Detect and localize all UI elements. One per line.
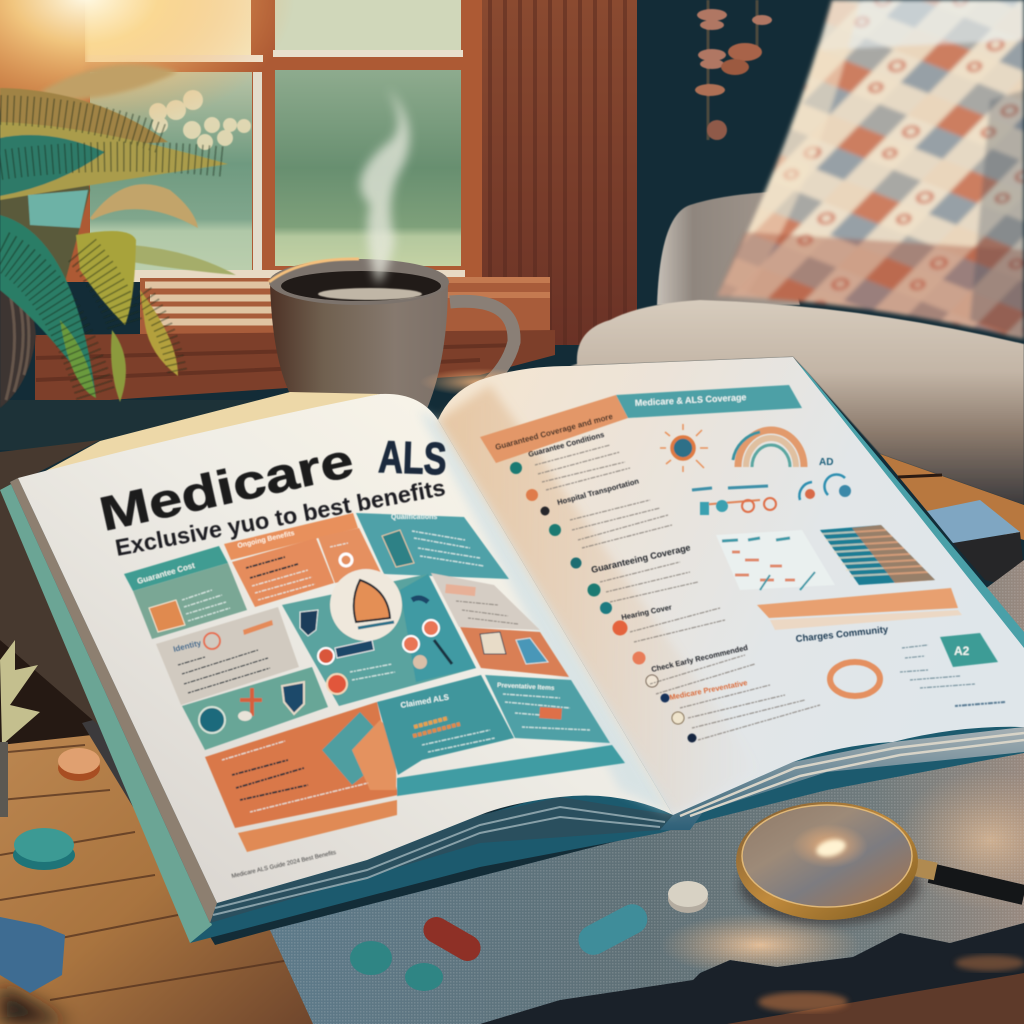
callout: A2 badge: A2 [954, 644, 970, 658]
coffee cup [269, 259, 514, 424]
pill: teal small [405, 963, 443, 991]
cream bar [770, 610, 962, 630]
orange strip [238, 800, 397, 852]
curtain [482, 0, 637, 345]
sun glow [0, 0, 295, 135]
panel: guarantee: Guarantee Cost [136, 561, 196, 586]
book cover [0, 358, 1024, 943]
armchair [570, 192, 1024, 505]
panel: teal eligibility: Qualifications [391, 514, 437, 521]
panel: big orange [205, 702, 398, 828]
header: teal [616, 385, 802, 418]
panel: center teal [282, 569, 476, 706]
chart legend text [900, 645, 975, 688]
list headings: Hospital Transportation [556, 476, 640, 507]
chart: striped bands [820, 525, 935, 585]
left page panels [124, 513, 625, 880]
panel: teal right lower: Preventative Items [497, 682, 555, 692]
page footer [955, 702, 1005, 706]
panel: teal eligibility [356, 513, 509, 579]
blurred orange foliage [0, 0, 85, 110]
bullet list [510, 462, 696, 742]
patterned pillow [717, 0, 1024, 339]
sunlight wedge beside cup [420, 368, 540, 396]
small magazine [927, 500, 1020, 543]
list headings: Hearing Cover [621, 602, 673, 622]
list text lines [535, 445, 820, 740]
wooden table [0, 454, 1024, 1024]
sub heading: Charges Community [795, 624, 889, 645]
panel: flow diagram [716, 530, 835, 590]
panel: orange right [460, 627, 569, 677]
orange bar [757, 588, 958, 618]
hanging plant [695, 0, 772, 140]
window [62, 0, 482, 282]
list headings [527, 430, 749, 702]
chart: donut ring [830, 662, 880, 696]
panel: orange coverage [224, 513, 358, 607]
panel: guarantee [124, 546, 247, 639]
header: orange: Guaranteed Coverage and more [494, 412, 614, 452]
panel: teal right lower [485, 675, 610, 743]
window sill [0, 278, 555, 450]
list headings: Medicare Preventative [669, 678, 748, 702]
list headings: Guarantee Conditions [527, 430, 605, 459]
fold highlight [40, 392, 380, 474]
capsule: red [419, 912, 485, 966]
steam [360, 88, 409, 285]
potted fern [0, 64, 236, 408]
panel: small orange [318, 528, 381, 583]
diagram: arrows row [692, 474, 851, 515]
placemat [82, 560, 1024, 1024]
panel: grey text: Identity [172, 638, 203, 654]
panel: teal lower: Claimed ALS [400, 692, 450, 710]
label: A2 small: AD [819, 457, 833, 468]
icon: sun [660, 424, 708, 472]
pill: orange [58, 748, 100, 781]
header: teal: Medicare & ALS Coverage [635, 392, 747, 408]
right page content [480, 385, 1005, 742]
panel: orange coverage: Ongoing Benefits [237, 530, 295, 550]
header: orange [480, 395, 628, 463]
list headings: Check Early Recommended [650, 643, 749, 674]
panel: grey text [156, 607, 299, 705]
seat cushion [570, 300, 1024, 505]
title [95, 431, 447, 542]
panel: sage icons [182, 667, 328, 750]
gutter shadow [418, 410, 673, 815]
pill: teal disc [350, 941, 392, 975]
left page [18, 394, 673, 903]
fabric at left [0, 440, 110, 735]
dark table front [460, 923, 1024, 1024]
footer text: Medicare ALS Guide 2024 Best Benefits [231, 850, 337, 880]
book [0, 357, 1024, 943]
pill: white [668, 881, 708, 913]
panel: teal lower [377, 675, 514, 775]
armrest [657, 192, 800, 305]
magnifying glass [736, 802, 1024, 925]
teal strip [397, 745, 625, 796]
small blue box [0, 917, 65, 993]
list headings: Guaranteeing Coverage [590, 542, 691, 575]
page stacks [10, 478, 1024, 923]
small potted plant [0, 640, 40, 817]
pill: teal left [13, 828, 75, 870]
title: ALS [378, 431, 447, 484]
icon: rainbow [733, 430, 804, 467]
panel: grey right [431, 573, 540, 630]
title: Medicare [95, 434, 358, 542]
right page [438, 357, 1024, 815]
callout: A2 badge [940, 633, 998, 667]
subtitle: Exclusive yuo to best benefits [113, 474, 447, 561]
capsule: teal [573, 899, 653, 960]
